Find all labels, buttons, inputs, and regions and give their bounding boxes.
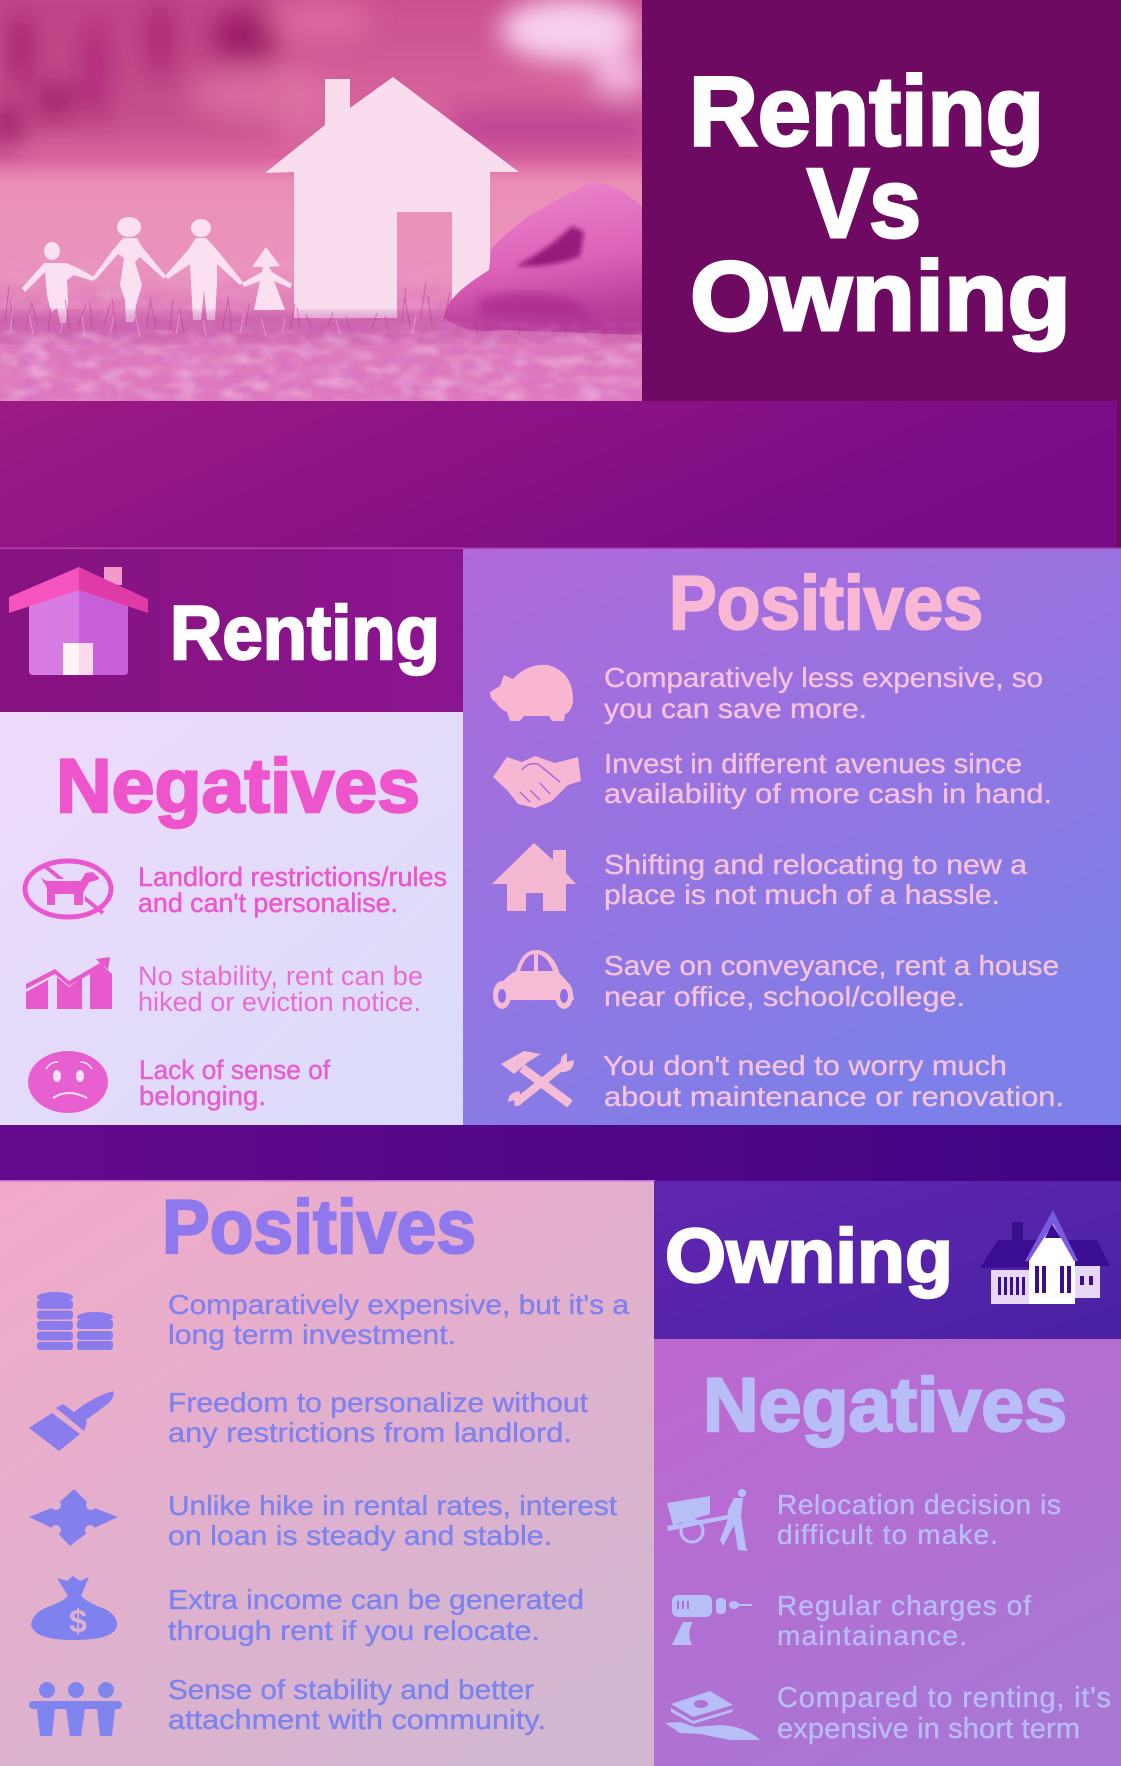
text: relocation decision <box>777 1489 1061 1550</box>
panel: renting header <box>0 549 463 712</box>
text: landlord restrictions: and can't personalise. <box>138 888 398 918</box>
icon: paint brush <box>29 1391 114 1451</box>
icon: four direction arrows <box>29 1489 118 1546</box>
icon: piggy bank <box>490 665 573 721</box>
text: relocation decision: difficult to make. <box>777 1519 998 1550</box>
text: extra income: Extra income can be generated <box>168 1584 584 1615</box>
icon: group of people <box>29 1682 122 1736</box>
text: freedom to personalize <box>168 1387 588 1448</box>
panel: renting positives <box>463 549 1121 1125</box>
empty gradient band <box>0 401 1121 549</box>
text: compared to renting: Compared to renting, it's <box>777 1682 1111 1714</box>
heading: Renting: Renting <box>170 591 440 676</box>
heading: Owning: Owning <box>665 1214 953 1299</box>
dark divider band <box>0 1125 1121 1181</box>
text: invest in avenues: availability of more cash in hand. <box>604 778 1052 809</box>
text: maintenance <box>603 1050 1064 1112</box>
icon: sad face <box>28 1051 108 1113</box>
icon: rising chart <box>26 957 112 1009</box>
icon: wheelbarrow and person <box>667 1489 748 1551</box>
text: no stability: No stability, rent can be <box>138 961 423 991</box>
title: Renting Vs Owning: Renting <box>689 56 1044 166</box>
text: unlike hike: on loan is steady and stable. <box>168 1520 552 1551</box>
text: regular charges <box>777 1590 1031 1651</box>
text: unlike hike <box>168 1490 617 1551</box>
text: lack of belonging <box>139 1055 330 1111</box>
icon: no dogs <box>25 861 111 917</box>
icon: hammer and wrench <box>501 1051 574 1106</box>
title: Renting Vs Owning: Vs <box>807 148 921 258</box>
text: save on conveyance: Save on conveyance, rent a house <box>604 950 1059 981</box>
text: compared to renting <box>777 1682 1111 1745</box>
text: freedom to personalize: Freedom to personalize without <box>168 1387 588 1418</box>
icon: coin stacks <box>37 1292 113 1350</box>
heading: Negatives: Negatives <box>703 1363 1067 1448</box>
icon: money bag <box>31 1576 117 1640</box>
text: extra income: through rent if you relocate. <box>168 1615 540 1646</box>
icon: money bag: $ <box>69 1603 87 1639</box>
text: comparatively less expensive: Comparatively less expensive, so <box>604 662 1043 693</box>
text: no stability: hiked or eviction notice. <box>138 987 421 1017</box>
text: invest in avenues <box>604 748 1052 809</box>
icon: money in hand <box>665 1691 760 1740</box>
title: Renting Vs Owning <box>689 56 1071 351</box>
grass foreground <box>0 312 660 342</box>
text: regular charges: Regular charges of <box>777 1590 1031 1621</box>
icon: pink house <box>9 567 148 675</box>
text: comparatively expensive: long term investment. <box>168 1319 456 1350</box>
text: freedom to personalize: any restrictions from landlord. <box>168 1417 572 1448</box>
heading: Positives: Positives <box>162 1185 476 1270</box>
text: shifting and relocating <box>604 849 1027 910</box>
hand <box>444 182 642 335</box>
house cut-out <box>265 77 519 318</box>
text: extra income <box>168 1584 584 1646</box>
panel: owning header <box>654 1181 1121 1339</box>
text: regular charges: maintainance. <box>777 1620 967 1651</box>
text: lack of belonging: Lack of sense of <box>139 1055 330 1085</box>
text: comparatively less expensive: you can save more. <box>604 693 867 724</box>
heading: Positives: Positives <box>669 561 983 646</box>
panel: owning positives <box>0 1180 655 1766</box>
text: shifting and relocating: place is not much of a hassle. <box>604 879 1000 910</box>
text: landlord restrictions <box>138 862 447 918</box>
text: maintenance: about maintenance or renovation. <box>604 1081 1064 1112</box>
paper family <box>22 217 292 323</box>
text: no stability <box>138 961 423 1017</box>
text: sense of stability <box>168 1674 546 1735</box>
text: maintenance: You don't need to worry much <box>603 1050 1007 1081</box>
icon: drill <box>672 1595 752 1645</box>
title: Renting Vs Owning: Owning <box>690 241 1071 351</box>
text: save on conveyance <box>604 950 1059 1012</box>
text: sense of stability: Sense of stability and better <box>168 1674 534 1705</box>
heading: Negatives: Negatives <box>56 744 420 829</box>
icon: handshake <box>493 756 581 808</box>
icon: large house <box>980 1210 1110 1304</box>
text: relocation decision: Relocation decision is <box>777 1489 1061 1520</box>
text: shifting and relocating: Shifting and relocating to new a <box>604 849 1027 880</box>
text: comparatively expensive: Comparatively expensive, but it's a <box>168 1289 629 1320</box>
icon: house <box>492 843 576 911</box>
text: unlike hike: Unlike hike in rental rates, interest <box>168 1490 617 1521</box>
icon: car <box>493 950 574 1009</box>
hero photo: paper house and family on grass <box>0 0 660 401</box>
text: lack of belonging: belonging. <box>139 1081 266 1111</box>
text: comparatively expensive <box>168 1289 629 1350</box>
text: sense of stability: attachment with community. <box>168 1704 546 1735</box>
panel: renting negatives <box>0 712 463 1125</box>
text: compared to renting: expensive in short term <box>777 1713 1080 1745</box>
text: invest in avenues: Invest in different avenues since <box>604 748 1022 779</box>
text: comparatively less expensive <box>604 662 1043 724</box>
panel: owning negatives <box>654 1339 1121 1766</box>
text: save on conveyance: near office, school/college. <box>604 981 965 1012</box>
text: landlord restrictions: Landlord restrictions/rules <box>138 862 447 892</box>
title panel <box>642 0 1121 401</box>
